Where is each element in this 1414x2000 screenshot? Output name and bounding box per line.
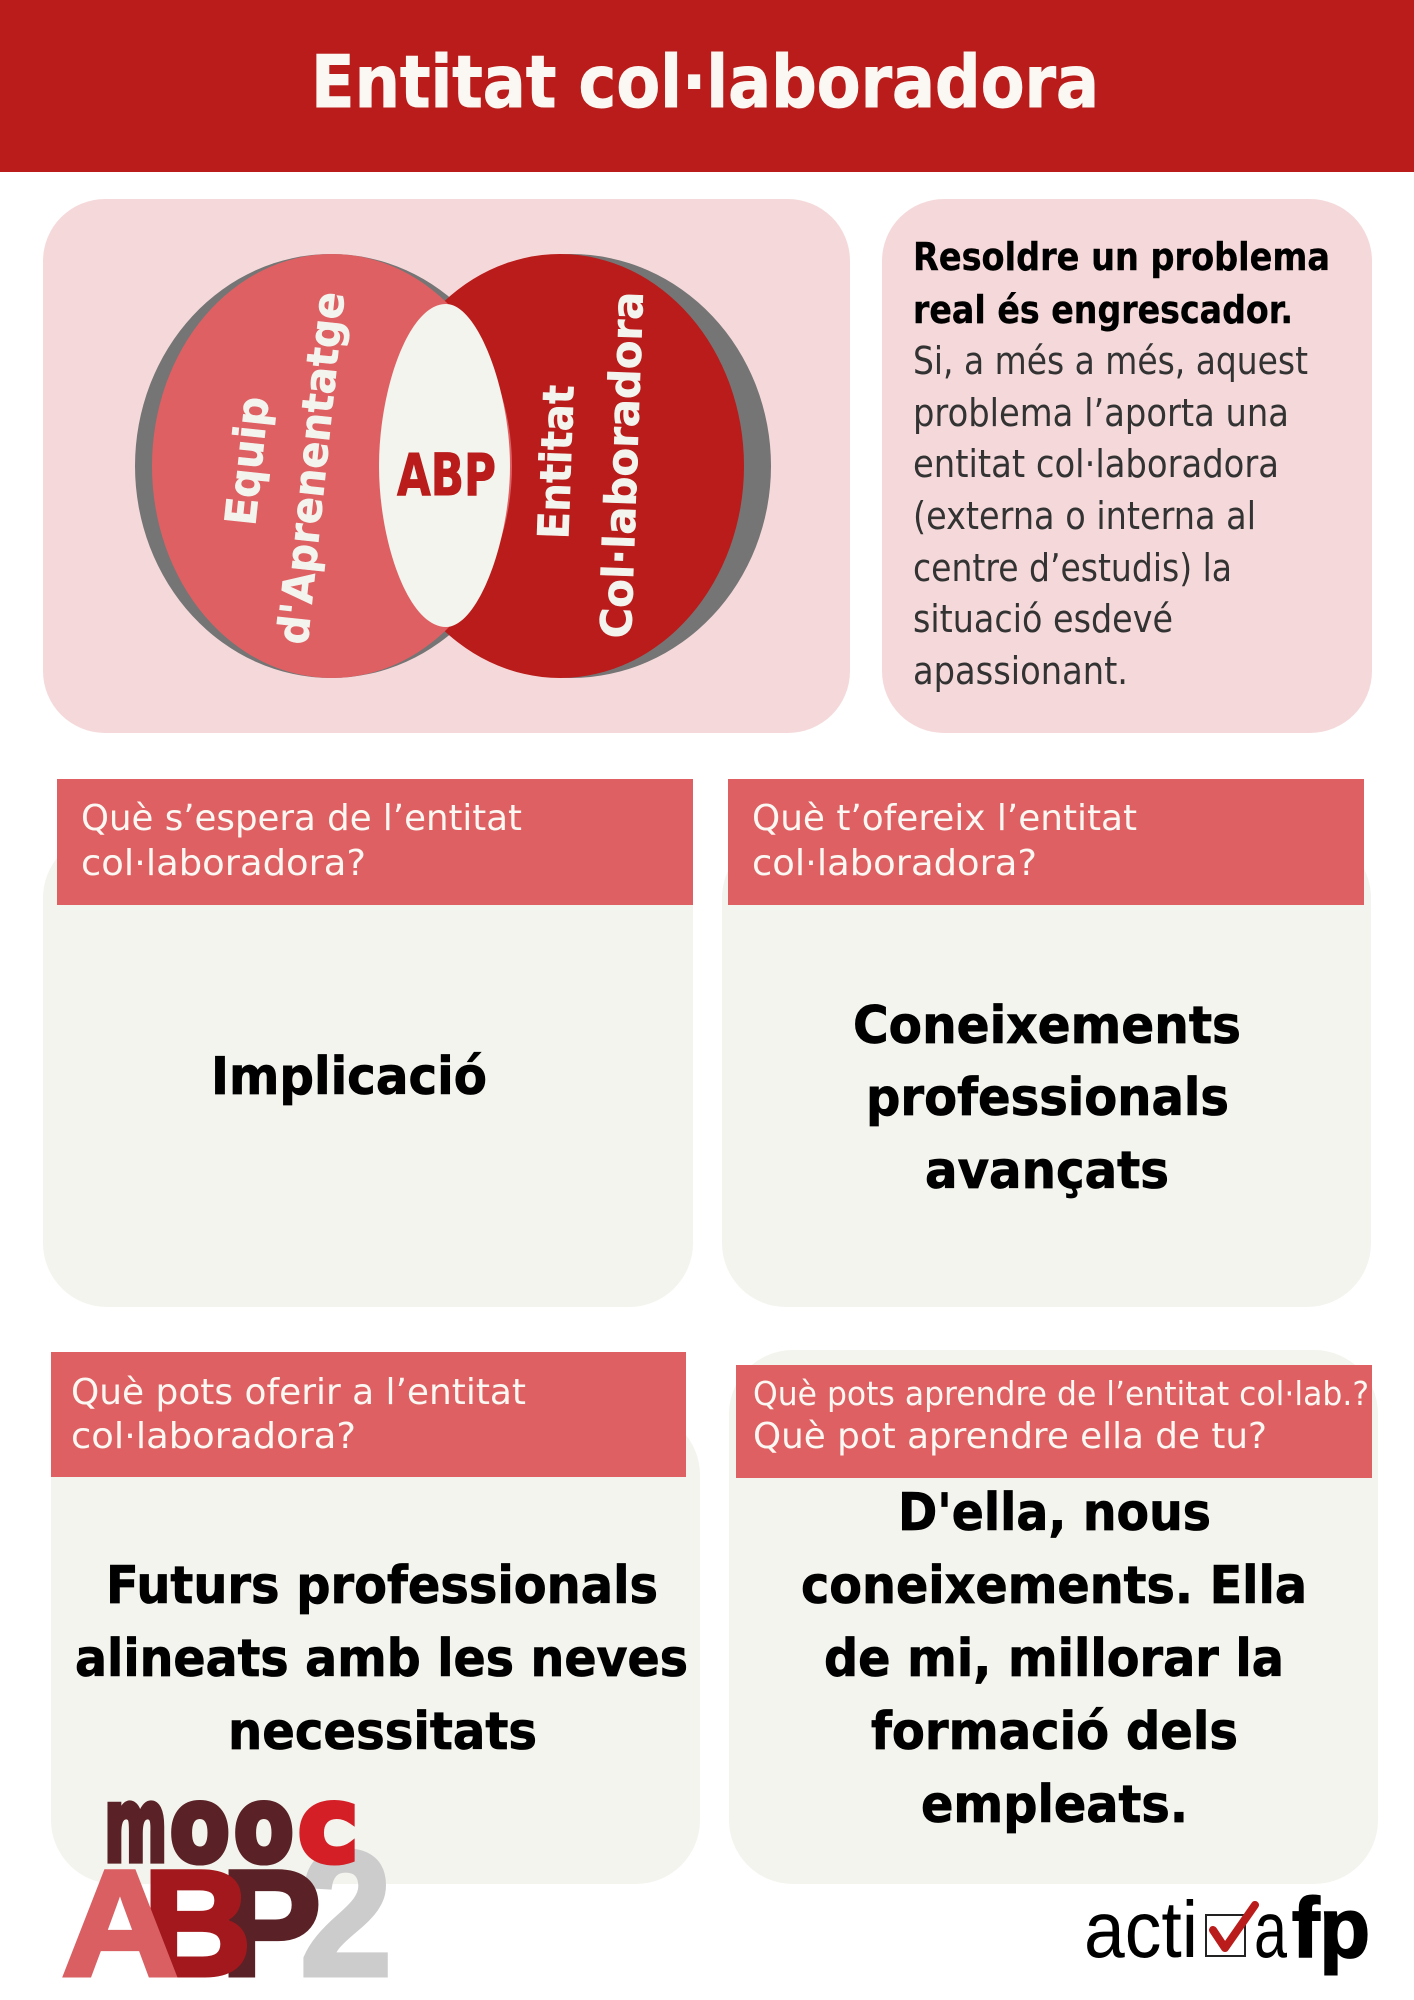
card answer — [75, 1556, 688, 1762]
logo: activafp: fp — [1292, 1881, 1370, 1975]
logo: MOOC ABP 2: o — [170, 1764, 230, 1886]
card answer: Futurs professionals — [106, 1556, 658, 1616]
card header — [57, 779, 693, 905]
logo: activafp — [1084, 1881, 1370, 1975]
card answer: necessitats — [228, 1702, 537, 1762]
intro paragraph: Si, a més a més, aquest — [913, 339, 1308, 383]
card header: Què pot aprendre ella de tu? — [753, 1416, 1267, 1457]
label: ABP: ABP — [397, 441, 496, 509]
intro bold lead: real és engrescador. — [913, 288, 1293, 332]
card header — [736, 1365, 1372, 1478]
venn shadow: left ellipse — [135, 254, 527, 678]
card answer: D'ella, nous — [898, 1483, 1211, 1543]
card header: Què t’ofereix l’entitat — [752, 798, 1137, 839]
card header: col·laboradora? — [71, 1416, 356, 1457]
card answer: de mi, millorar la — [824, 1629, 1284, 1689]
intro paragraph: entitat col·laboradora — [913, 442, 1279, 486]
card answer: formació dels — [871, 1702, 1238, 1762]
card answer: empleats. — [921, 1775, 1188, 1835]
card header — [51, 1352, 686, 1477]
intro paragraph: problema l’aporta una — [913, 391, 1289, 435]
panel: intro text — [882, 199, 1372, 733]
logo: MOOC ABP 2 — [62, 1764, 392, 2000]
card answer: professionals — [866, 1068, 1229, 1128]
logo: activafp: a — [1254, 1885, 1287, 1974]
card: què pots oferir — [51, 1352, 700, 1884]
card answer: avançats — [925, 1141, 1169, 1201]
card: què t'ofereix — [722, 779, 1371, 1307]
logo: activafp: acti — [1084, 1885, 1198, 1974]
card: què s'espera — [43, 779, 693, 1307]
card answer: Coneixements — [853, 996, 1241, 1056]
intro paragraph: centre d’estudis) la — [913, 546, 1232, 590]
card answer: alineats amb les neves — [75, 1629, 688, 1689]
panel: venn diagram — [43, 199, 850, 733]
logo: MOOC ABP 2: c — [298, 1766, 358, 1886]
intro paragraph: situació esdevé — [913, 597, 1173, 641]
intro bold lead: Resoldre un problema — [913, 235, 1330, 279]
venn: overlap lens — [379, 304, 510, 627]
venn: equip ellipse — [152, 254, 512, 678]
card answer: Implicació — [211, 1047, 487, 1107]
intro paragraph: (externa o interna al — [913, 494, 1256, 538]
card header: Què pots aprendre de l’entitat col·lab.? — [753, 1374, 1369, 1413]
label: Equip: Equip — [216, 394, 280, 528]
intro paragraph: apassionant. — [913, 649, 1128, 693]
card header: col·laboradora? — [81, 843, 366, 884]
card header: col·laboradora? — [752, 843, 1037, 884]
card answer — [801, 1483, 1307, 1835]
icon: checkbox — [1206, 1905, 1255, 1956]
intro paragraph — [913, 339, 1308, 693]
venn shadow: right ellipse — [371, 254, 771, 678]
intro bold lead — [913, 235, 1330, 332]
logo: MOOC ABP 2: m — [104, 1765, 167, 1885]
label: Entitat: Entitat — [529, 384, 585, 540]
card header: Què pots oferir a l’entitat — [71, 1372, 526, 1413]
card: què pots aprendre — [729, 1350, 1378, 1884]
card answer: coneixements. Ella — [801, 1556, 1307, 1616]
card header: Què s’espera de l’entitat — [81, 798, 522, 839]
venn: entitat ellipse — [376, 254, 744, 678]
label: d'Aprenentatge: d'Aprenentatge — [269, 289, 355, 647]
title: Entitat col·laboradora — [311, 40, 1099, 124]
logo: MOOC ABP 2: o — [234, 1764, 294, 1886]
card answer — [853, 996, 1241, 1201]
header band with title — [0, 0, 1414, 172]
label: Col·laboradora: Col·laboradora — [592, 291, 654, 639]
card header — [728, 779, 1364, 905]
